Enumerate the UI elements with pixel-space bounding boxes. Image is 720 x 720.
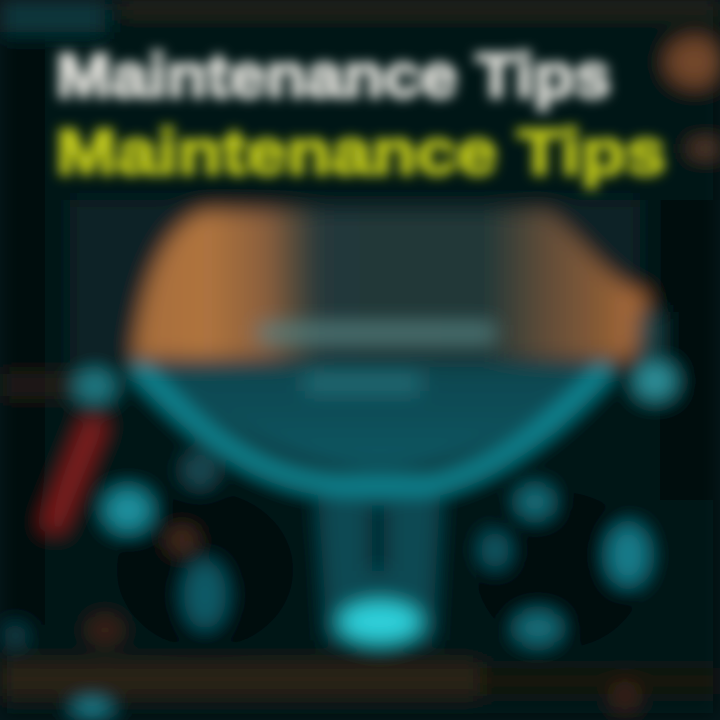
car hood and teal funnel (135, 362, 610, 486)
title: white: Maintenance Tips (56, 42, 611, 111)
bottom teal glow (74, 701, 110, 719)
dashboard label strip (258, 324, 494, 342)
left wheel and details (2, 370, 293, 648)
car windshield (134, 212, 646, 358)
right wheel and details (476, 312, 675, 713)
central grille (318, 495, 440, 642)
title: yellow: Maintenance Tips (56, 116, 666, 188)
